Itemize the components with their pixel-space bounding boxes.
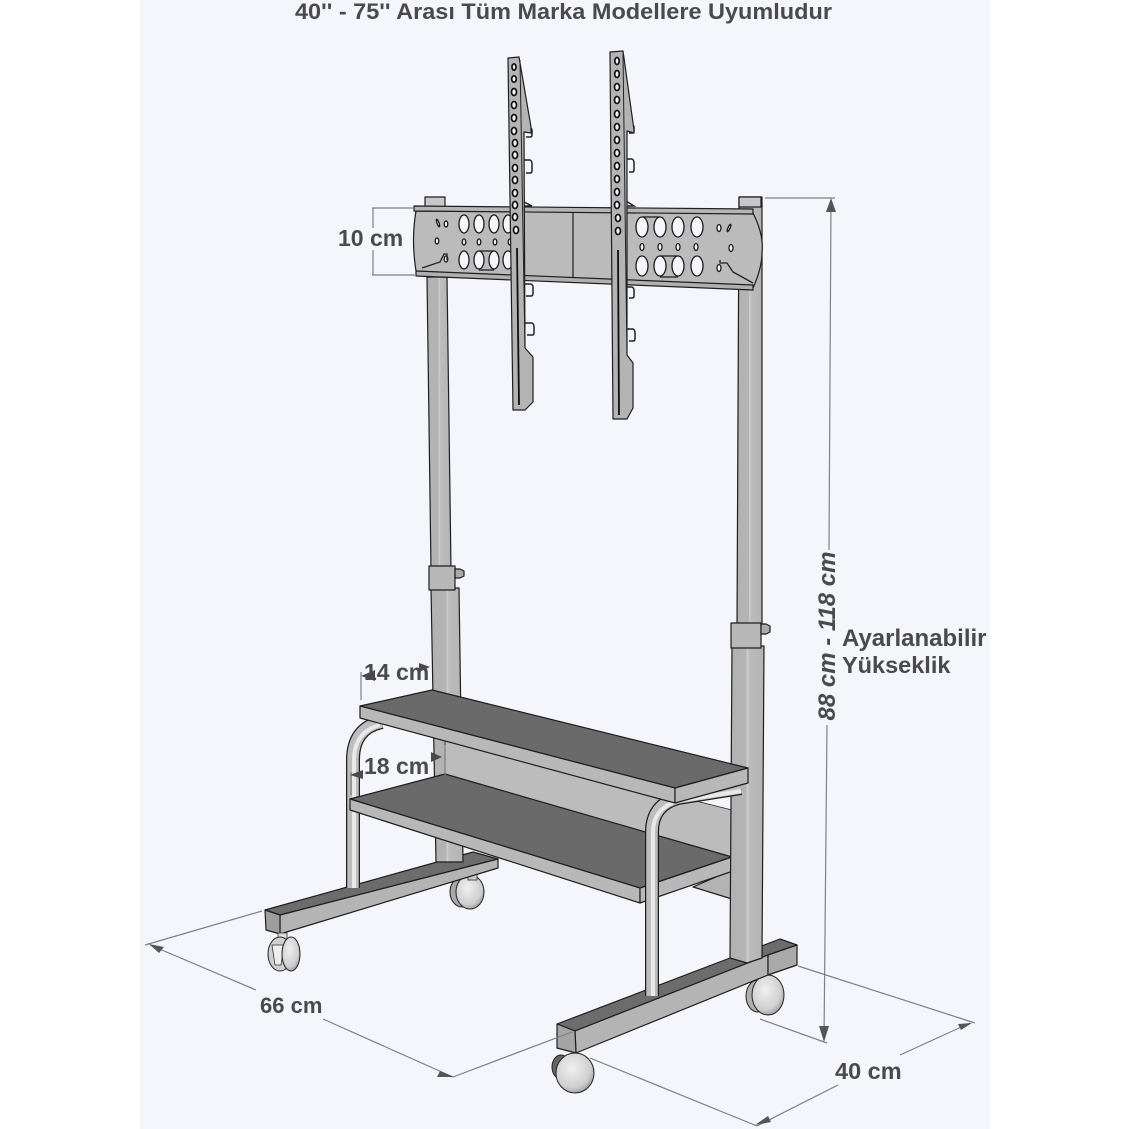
right tube support <box>652 788 741 996</box>
left lower post <box>431 588 463 862</box>
mount plate <box>414 211 762 288</box>
dimension: 40 cm <box>590 966 975 1126</box>
dimension: 14 cm: 14 cm <box>364 659 429 685</box>
left base bar <box>265 852 498 934</box>
bracket holes <box>614 58 620 234</box>
background panel <box>140 0 990 1129</box>
rear panel between shelves <box>445 738 732 870</box>
right upper post <box>737 197 762 625</box>
dimension: 18 cm <box>350 745 445 795</box>
icon: rear right caster <box>746 975 784 1015</box>
bracket hooks <box>524 128 534 335</box>
bottom flange <box>416 271 753 290</box>
right vertical TV bracket <box>610 51 635 419</box>
dimension: 10 cm: 10 cm <box>338 225 403 251</box>
dimension: 66 cm <box>145 911 572 1077</box>
dimension: 88 cm - 118 cm height: 88 cm - 118 cm <box>814 552 841 720</box>
right height collar <box>731 623 770 648</box>
crossbar mount <box>414 197 762 290</box>
dimension: 88 cm - 118 cm height <box>760 198 841 1043</box>
dimension: 14 cm <box>361 659 430 700</box>
lower shelf <box>350 774 733 903</box>
left tube support <box>353 722 382 888</box>
bracket body <box>508 57 533 410</box>
mount clips <box>422 254 753 283</box>
dimension: 40 cm: 40 cm <box>835 1058 902 1084</box>
adjustable height label: Yükseklik <box>842 652 951 678</box>
dimension: 10 cm <box>338 208 416 275</box>
right lower post <box>730 646 764 963</box>
right mount holes <box>636 217 733 277</box>
bracket holes <box>512 64 518 233</box>
dimension: 18 cm: 18 cm <box>364 753 429 779</box>
right base bar <box>552 939 797 1093</box>
right post <box>737 197 762 625</box>
adjustable height label <box>842 625 987 678</box>
left height collar <box>429 566 464 590</box>
icon: rear left caster <box>450 874 484 909</box>
rear panel lower part <box>693 870 732 899</box>
left upper post <box>427 277 451 570</box>
post top cap <box>739 197 761 207</box>
top flange <box>414 206 753 214</box>
left post cap <box>425 197 445 207</box>
icon: front left caster <box>268 933 300 971</box>
back base bar with left post and caster <box>265 852 498 971</box>
bracket hooks <box>626 125 635 341</box>
dimension: 66 cm: 66 cm <box>260 993 322 1018</box>
upper shelf <box>360 690 748 803</box>
bracket body <box>610 51 634 419</box>
left vertical TV bracket <box>508 57 534 410</box>
left mount holes <box>435 215 513 270</box>
adjustable height label: Ayarlanabilir <box>842 625 987 652</box>
icon: front right caster <box>552 1053 594 1093</box>
left post <box>427 277 464 862</box>
